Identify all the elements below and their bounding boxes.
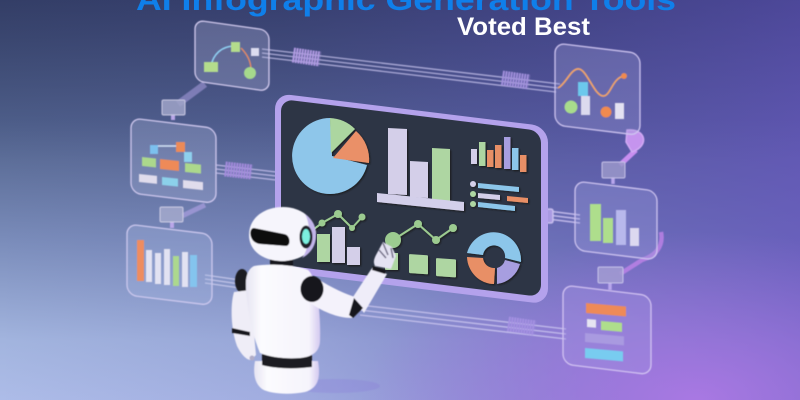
connector: bottom left panel to robot [205,275,240,288]
robot: upper arm [306,279,358,318]
connector: left panel to board [216,165,276,180]
subtitle: Voted Best [457,13,591,41]
robot: waist [262,354,312,368]
connector: board to bottom right panel [360,305,566,339]
panel: list, bottom right [563,285,651,375]
chart: lower left line and bars [310,210,366,265]
chart: large bars [377,128,464,211]
connector: right panels to each other [598,130,662,290]
chart: small bars [471,137,526,172]
panel: bar chart, middle right [575,181,657,260]
chart: legend list [470,181,528,211]
robot: forearm [353,268,387,313]
robot: head [249,207,316,261]
panel: org chart, middle left [131,118,216,203]
panel: line and shapes, top right [555,43,640,135]
robot: visor [250,228,290,246]
robot: torso [246,265,320,358]
robot: back arm [232,269,256,360]
connector: left panels to each other [160,84,205,228]
robot [232,207,396,394]
connector: top left panel to top right panel [262,49,560,92]
robot: shoulder [300,276,324,302]
chart: lower middle line and squares [385,220,457,277]
robot: base [254,361,319,394]
robot: eye [300,226,312,248]
robot: wrist [372,266,386,274]
robot: head purple side [302,214,316,258]
panel: bar chart, bottom left [127,224,212,305]
connector: board to middle right panel [546,209,580,223]
panel: flow diagram, top left [195,20,269,91]
connectors between panels [160,49,662,339]
robot: neck [262,258,296,270]
robot: floor glow [290,379,380,393]
robot: elbow [349,298,363,318]
chart: donut [467,232,521,284]
chart: pie [292,118,369,194]
robot: hand [374,242,396,269]
panel: main dashboard board [275,93,548,305]
